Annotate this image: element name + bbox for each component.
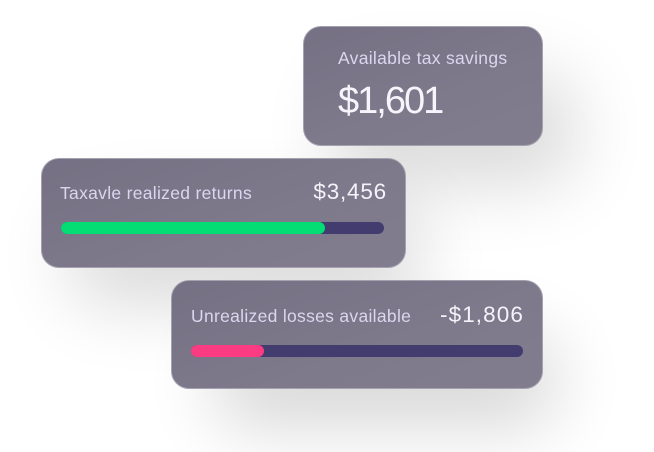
value: $1,601: $1,601 (338, 80, 442, 122)
panel: unrealized losses (171, 280, 543, 389)
value: -$1,806: -$1,806 (440, 302, 524, 327)
progress bar: green (61, 222, 384, 234)
label: available tax savings: Available tax savings (338, 48, 507, 68)
panel: available tax savings (303, 26, 543, 146)
label: unrealized losses: Unrealized losses available (191, 306, 411, 326)
progress bar: pink (190, 345, 522, 357)
panel: taxable realized returns (41, 158, 406, 268)
label: realized returns: Taxavle realized returns (60, 183, 252, 203)
value: $3,456: $3,456 (313, 179, 387, 204)
